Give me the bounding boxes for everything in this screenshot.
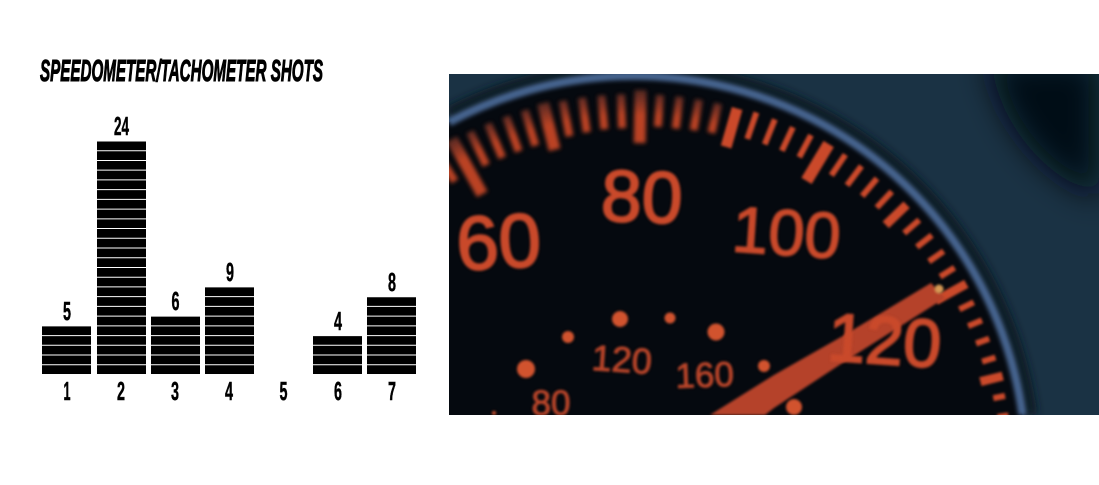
dark corner of the instrument cowl [985, 60, 1099, 200]
bar 6: value 4 [334, 306, 342, 406]
small dial numbers: 80 [532, 384, 570, 423]
needle highlight [934, 284, 944, 294]
bar 3: value 6 [171, 286, 180, 406]
bar 7: value 8: 7 [388, 376, 396, 406]
tick marks: upper left, faded [419, 90, 718, 194]
small dial numbers [530, 344, 735, 415]
speedometer needle [710, 283, 945, 415]
large dial numbers: 60 [454, 198, 543, 287]
bar 4: value 9: 4 [225, 376, 233, 406]
bar 6: value 4: 4 [334, 306, 342, 336]
rim shadow [449, 68, 1030, 415]
large dial numbers [457, 168, 942, 370]
tick marks: right side, bright [726, 108, 1012, 455]
bar 1: value 5: 5 [63, 296, 71, 326]
panel: bar chart of speedometer shots: SPEEDOMETER/TACHOMETER SHOTS [40, 53, 323, 88]
bar 1: value 5: 1 [64, 376, 70, 406]
bar 2: value 24 [114, 111, 129, 406]
bar 3: value 6: 3 [171, 376, 179, 406]
panel: speedometer photo [449, 74, 1099, 415]
small dial numbers: 160 [675, 355, 734, 396]
bar 2: value 24: 2 [117, 376, 125, 406]
large dial numbers: 120 [825, 299, 944, 383]
bar 5: no value: 5 [280, 376, 288, 406]
bar 7: value 8: 8 [388, 267, 396, 297]
panel: bar chart of speedometer shots [40, 53, 396, 406]
bar 3: value 6: 6 [172, 286, 180, 316]
gauge rim [449, 76, 1022, 415]
bar 2: value 24: 24 [114, 111, 129, 141]
dial dots [492, 311, 802, 415]
bar 1: value 5 [63, 296, 71, 406]
bar 4: value 9 [225, 257, 234, 406]
bar 4: value 9: 9 [226, 257, 234, 287]
large dial numbers: 80 [600, 156, 684, 239]
small dial numbers: 120 [590, 337, 653, 382]
large dial numbers: 100 [730, 192, 843, 273]
bar 7: value 8 [388, 267, 396, 406]
gauge dial [449, 76, 1022, 415]
bar 6: value 4: 6 [334, 376, 342, 406]
